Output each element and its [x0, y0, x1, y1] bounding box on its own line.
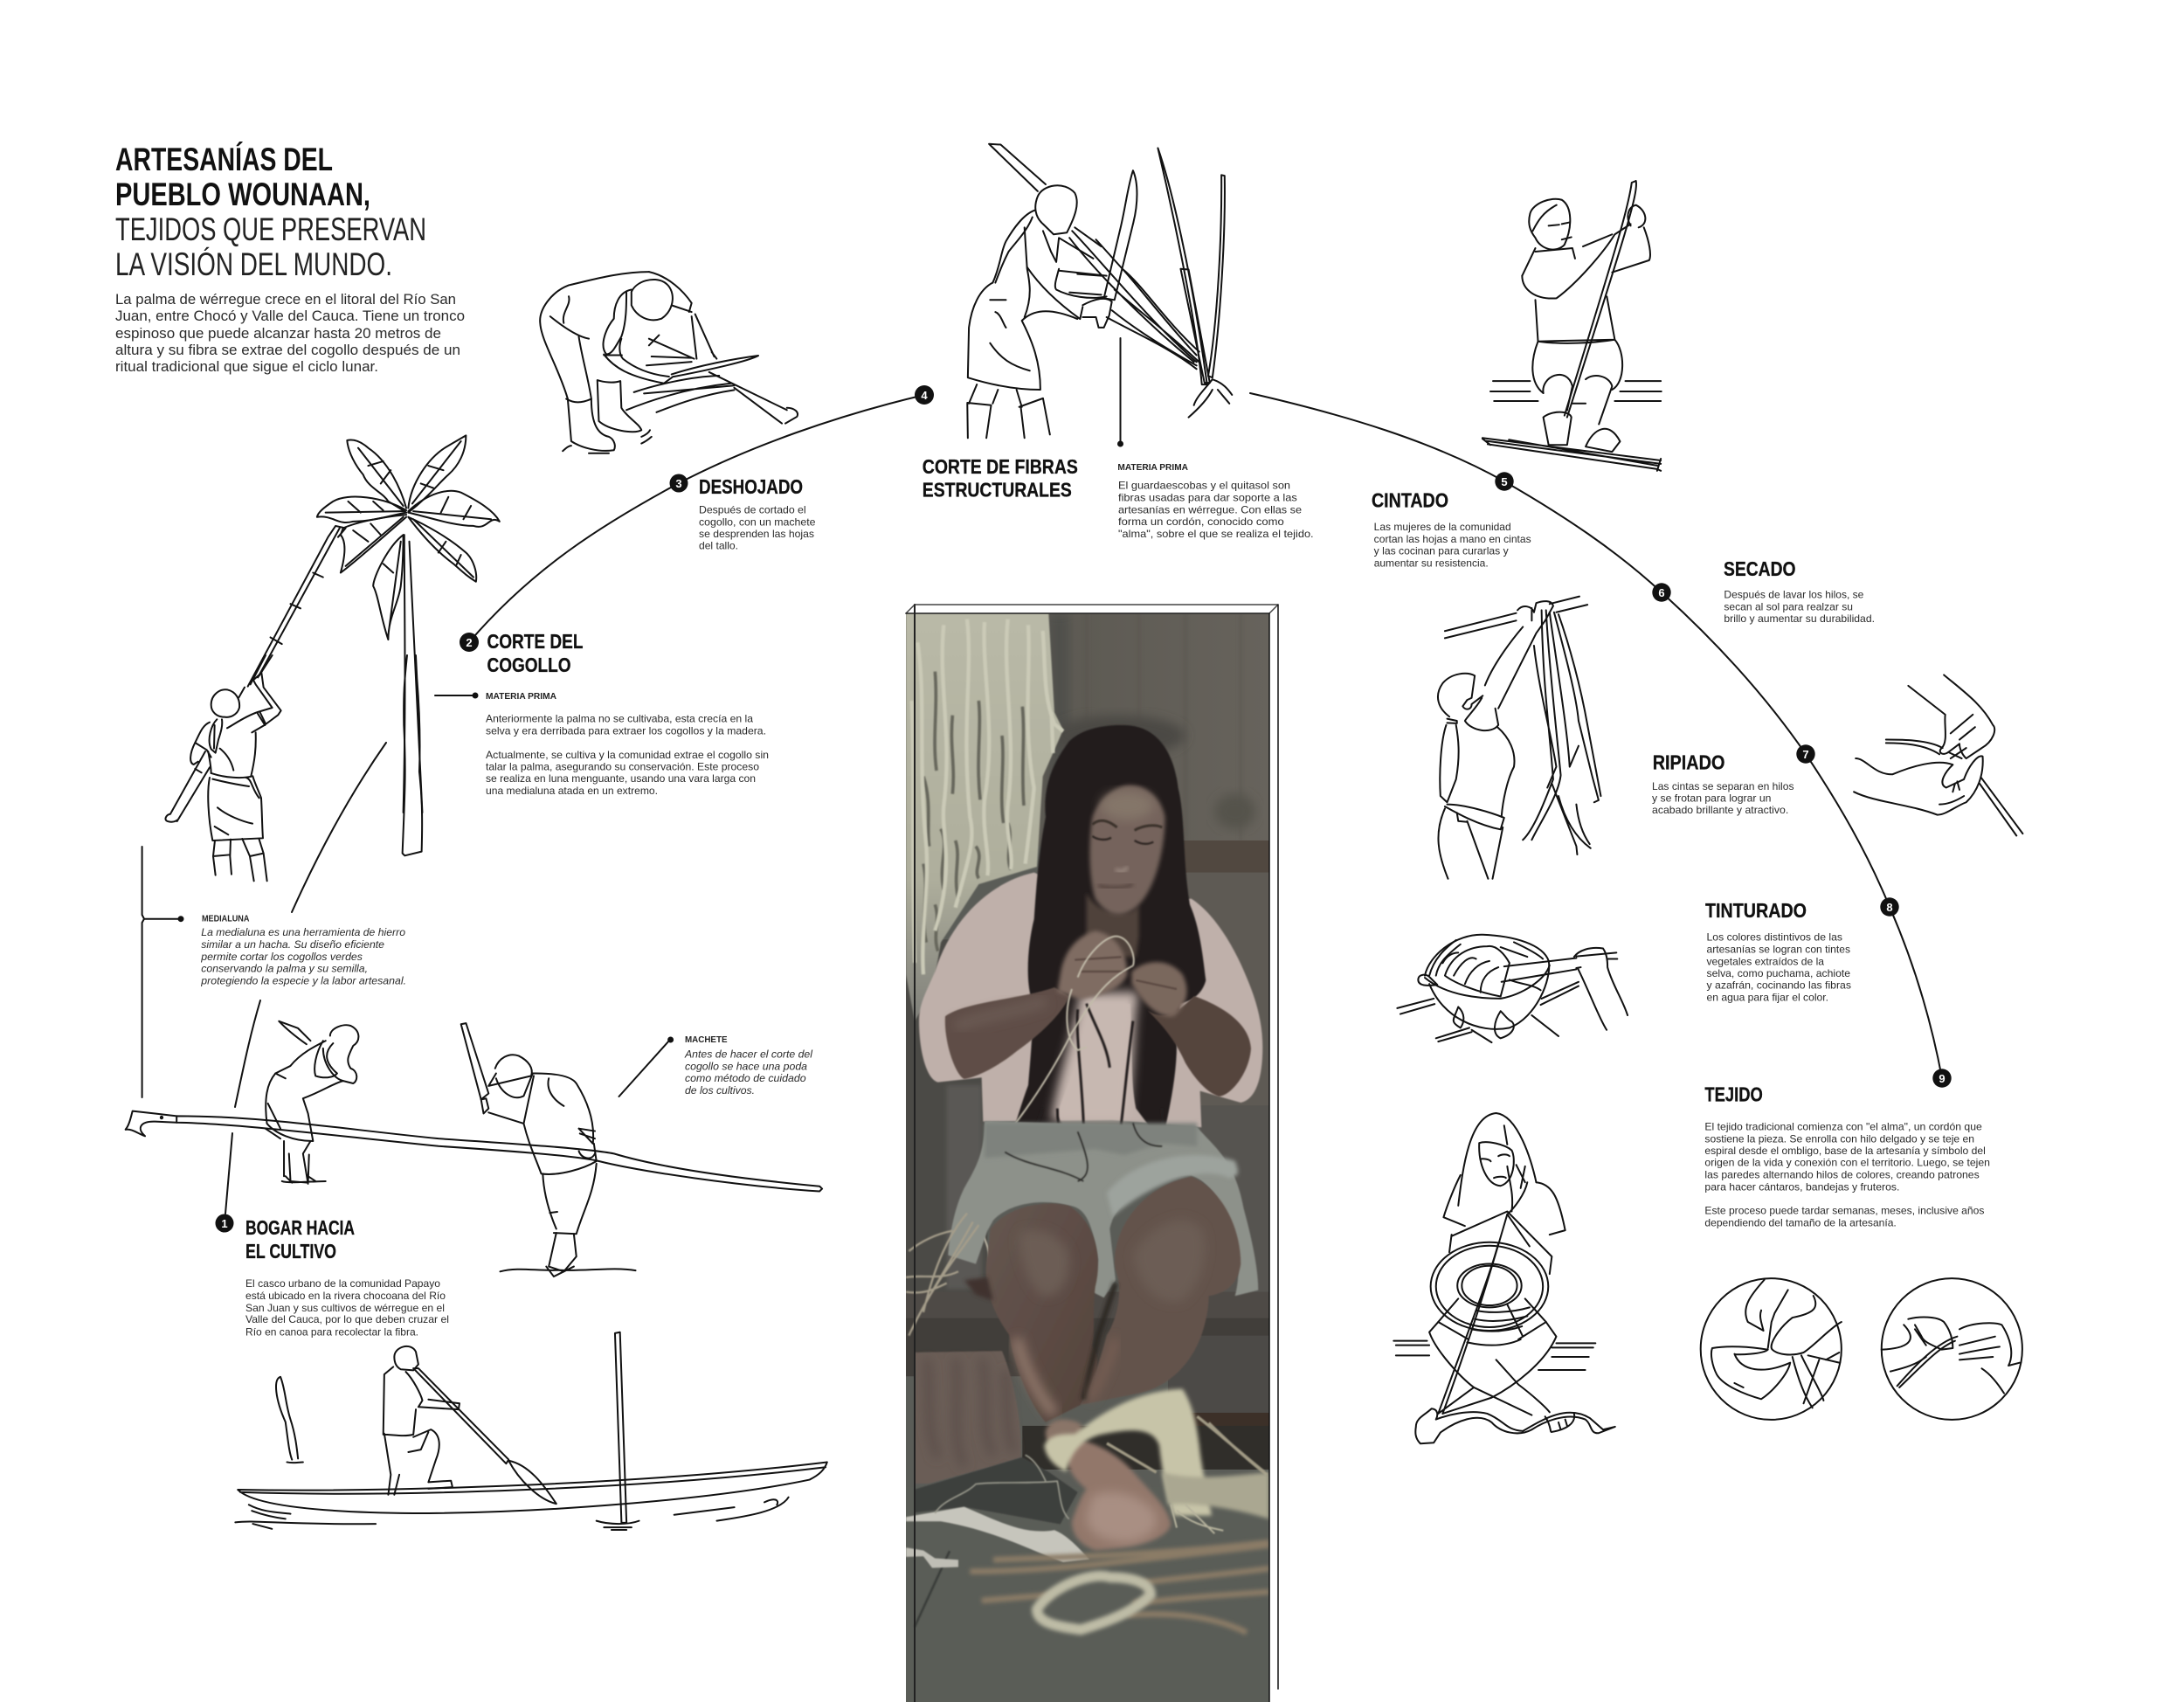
machete callout: cogollo se hace una poda [685, 1061, 807, 1073]
bracket: medialuna [142, 847, 183, 1097]
wall upper [906, 613, 1269, 1301]
step 2 text: corte del cogollo: Anteriormente la palma no se cultivaba, esta crecía en la [486, 713, 753, 725]
step 9 text: tejido: dependiendo del tamaño de la artesanía. [1704, 1216, 1897, 1228]
hands [1057, 931, 1127, 1000]
step 4 text: corte de fibras estructurales: CORTE DE FIBRAS [923, 455, 1078, 478]
step 9 text: tejido: TEJIDO [1704, 1083, 1763, 1106]
step numbers: 7 [1802, 748, 1809, 761]
photo: woman weaving [906, 613, 1269, 1702]
icon: pole to palm [248, 526, 346, 687]
step 3 text: deshojado [699, 475, 816, 552]
step 8 text: tinturado: Los colores distintivos de las [1707, 931, 1842, 944]
left leg [986, 1204, 1098, 1422]
step 5 text: cintado: y las cocinan para curarlas y [1374, 545, 1509, 557]
step 5 text: cintado: cortan las hojas a mano en cintas [1374, 533, 1531, 545]
icon: palm trunk base [403, 655, 422, 855]
title [115, 142, 426, 282]
intro text [115, 292, 465, 375]
medialuna callout: conservando la palma y su semilla, [201, 963, 368, 975]
step 4 text: corte de fibras estructurales [923, 455, 1078, 502]
step 9 text: tejido: espiral desde el ombligo, base de la artesanía y símbolo del [1704, 1145, 1986, 1157]
icon: detail circle hands weaving [1882, 1278, 2022, 1420]
step 8 text: tinturado: artesanías se logran con tintes [1707, 943, 1850, 955]
icon: woman with pole [165, 655, 281, 881]
step 5 text: cintado: Las mujeres de la comunidad [1374, 521, 1511, 533]
step 8 text: tinturado: selva, como puchama, achiote [1707, 967, 1850, 979]
machete callout: Antes de hacer el corte del [684, 1048, 812, 1061]
fiber bundle [1044, 1389, 1212, 1516]
machete connector [619, 1038, 673, 1097]
title: ARTESANÍAS DEL [115, 142, 333, 177]
left arm [945, 987, 1069, 1079]
intro text: La palma de wérregue crece en el litoral del Río San [115, 292, 456, 308]
step 1 text: bogar hacia el cultivo [245, 1216, 449, 1339]
step 1 text: bogar hacia el cultivo: Valle del Cauca, por lo que deben cruzar el [245, 1313, 449, 1325]
materia prima fibras text: El guardaescobas y el quitasol son [1118, 480, 1290, 492]
right arm [1148, 996, 1251, 1097]
fibers curtain [906, 613, 1063, 1021]
icon: woman cutting fibers [967, 144, 1232, 438]
machete callout [684, 1035, 812, 1097]
step 9 text: tejido [1704, 1083, 1990, 1228]
medialuna callout: MEDIALUNA [202, 915, 249, 924]
step 8 text: tinturado: vegetales extraídos de la [1707, 955, 1824, 967]
step 2 text: corte del cogollo: una medialuna atada en un extremo. [486, 785, 658, 797]
step numbers: 2 [466, 636, 473, 649]
step 6 text: secado: brillo y aumentar su durabilidad. [1724, 612, 1875, 625]
stone block [915, 1351, 1078, 1627]
step numbers: 3 [675, 477, 682, 490]
icon: hands rubbing strips [1854, 675, 2022, 835]
step 6 text: secado: Después de lavar los hilos, se [1724, 589, 1864, 601]
medialuna callout: similar a un hacha. Su diseño eficiente [201, 938, 384, 951]
step 1 text: bogar hacia el cultivo: está ubicado en la rivera chocoana del Río [245, 1290, 446, 1302]
icon: woman with machete bent [266, 1021, 358, 1184]
step 2 text: corte del cogollo: talar la palma, asegurando su conservación. Este proceso [486, 760, 759, 772]
step 5 text: cintado: CINTADO [1372, 489, 1448, 512]
step 1 text: bogar hacia el cultivo: Río en canoa para recolectar la fibra. [245, 1326, 418, 1339]
photo frame [906, 605, 1278, 1702]
cream loop [1037, 1576, 1151, 1629]
step 8 text: tinturado: y azafrán, cocinando las fibras [1707, 979, 1851, 992]
step 3 text: deshojado: DESHOJADO [699, 475, 803, 498]
icon: palm tree [317, 435, 500, 813]
step 6 text: secado: SECADO [1724, 557, 1796, 580]
step 3 text: deshojado: cogollo, con un machete [699, 515, 816, 528]
step 5 text: cintado [1372, 489, 1531, 570]
icon: woman stripping leaves [540, 272, 798, 453]
step numbers [215, 385, 1952, 1232]
step 2 text: corte del cogollo: MATERIA PRIMA [486, 692, 556, 702]
title: LA VISIÓN DEL MUNDO. [115, 246, 392, 282]
step 3 text: deshojado: del tallo. [699, 540, 738, 552]
step 9 text: tejido: sostiene la pieza. Se enrolla con hilo delgado y se teje en [1704, 1132, 1974, 1145]
step 1 text: bogar hacia el cultivo: El casco urbano de la comunidad Papayo [245, 1277, 440, 1290]
icon: detail circle foot weaving [1701, 1278, 1842, 1420]
step numbers: 4 [921, 389, 928, 402]
step 7 text: ripiado: RIPIADO [1653, 751, 1724, 773]
loose fibers left [906, 1214, 978, 1336]
intro text: Juan, entre Chocó y Valle del Cauca. Tiene un tronco [115, 308, 465, 324]
step 2 text: corte del cogollo: se realiza en luna menguante, usando una vara larga con [486, 772, 756, 785]
icon: woman hanging strips [1438, 597, 1600, 879]
step 2 text: corte del cogollo: selva y era derribada para extraer los cogollos y la madera. [486, 725, 766, 737]
step 9 text: tejido: origen de la vida y conexión con el territorio. Luego, se tejen [1704, 1157, 1990, 1169]
step 2 text: corte del cogollo: CORTE DEL [487, 630, 584, 653]
step numbers: 6 [1658, 586, 1665, 599]
step 1 text: bogar hacia el cultivo: EL CULTIVO [245, 1240, 336, 1263]
step 8 text: tinturado [1705, 899, 1851, 1003]
step 7 text: ripiado [1652, 751, 1794, 816]
medialuna callout: La medialuna es una herramienta de hierro [201, 926, 405, 938]
medialuna callout: permite cortar los cogollos verdes [200, 951, 363, 963]
icon: canoe with rower [235, 1332, 827, 1530]
intro text: ritual tradicional que sigue el ciclo lunar. [115, 359, 378, 375]
step 3 text: deshojado: se desprenden las hojas [699, 528, 814, 540]
intro text: espinoso que puede alcanzar hasta 20 metros de [115, 326, 441, 342]
step numbers: 5 [1501, 475, 1508, 488]
bench and floor back [906, 1291, 1268, 1470]
right leg [1081, 1177, 1241, 1405]
step numbers: 1 [221, 1217, 228, 1230]
icon: woman weaving basket [1393, 1113, 1615, 1443]
step 9 text: tejido: Este proceso puede tardar semanas, meses, inclusive años [1704, 1205, 1984, 1217]
feet [1046, 1420, 1082, 1446]
step 7 text: ripiado: Las cintas se separan en hilos [1652, 780, 1794, 792]
icon: man with cap and machete [461, 1023, 635, 1276]
machete callout: como método de cuidado [685, 1072, 806, 1084]
chest with hair [1052, 992, 1139, 1122]
medialuna callout [200, 915, 406, 986]
step 2 text: corte del cogollo: Actualmente, se cultiva y la comunidad extrae el cogollo sin [486, 749, 769, 761]
cord [984, 935, 1136, 1256]
materia prima fibras text: fibras usadas para dar soporte a las [1118, 491, 1297, 503]
materia prima fibras text: "alma", sobre el que se realiza el tejido. [1118, 528, 1314, 540]
step 1 text: bogar hacia el cultivo: San Juan y sus cultivos de wérregue en el [245, 1302, 445, 1314]
materia prima fibras text: forma un cordón, conocido como [1118, 515, 1284, 528]
medialuna callout: protegiendo la especie y la labor artesanal. [200, 974, 406, 986]
step 8 text: tinturado: en agua para fijar el color. [1707, 991, 1828, 1003]
title: TEJIDOS QUE PRESERVAN [115, 211, 426, 247]
machete callout: de los cultivos. [685, 1084, 755, 1097]
step 1 text: bogar hacia el cultivo: BOGAR HACIA [245, 1216, 355, 1239]
shorts [948, 1121, 1258, 1297]
step 9 text: tejido: El tejido tradicional comienza con "el alma", un cordón que [1704, 1121, 1982, 1133]
step numbers: 8 [1886, 901, 1893, 914]
step 9 text: tejido: para hacer cántaros, bandejas y fruteros. [1704, 1180, 1899, 1193]
materia prima fibras text [1117, 463, 1314, 540]
step 2 text: corte del cogollo [486, 630, 769, 797]
intro text: altura y su fibra se extrae del cogollo después de un [115, 342, 460, 358]
floor strips [906, 1507, 1089, 1562]
icon: long pole with medialuna hook [126, 1111, 822, 1191]
step 6 text: secado: secan al sol para realzar su [1724, 601, 1853, 613]
materia prima fibras text: MATERIA PRIMA [1117, 463, 1188, 473]
machete callout: MACHETE [685, 1035, 728, 1045]
step 9 text: tejido: las paredes alternando hilos de colores, creando patrones [1704, 1169, 1980, 1181]
step numbers: 9 [1939, 1072, 1946, 1085]
icon: pot on fire [1397, 935, 1628, 1042]
title: PUEBLO WOUNAAN, [115, 176, 370, 212]
callout connector: materia prima palm [435, 694, 477, 697]
materia prima fibras text: artesanías en wérregue. Con ellas se [1118, 503, 1302, 515]
step 7 text: ripiado: acabado brillante y atractivo. [1652, 804, 1788, 816]
step 4 text: corte de fibras estructurales: ESTRUCTURALES [923, 479, 1072, 502]
shirt [919, 873, 1262, 1127]
timeline arc [225, 393, 1942, 1214]
icon: woman on bench stripping [1482, 181, 1662, 471]
callout connector: materia prima fibras [1118, 338, 1123, 446]
tan strands [970, 1542, 1269, 1633]
step 8 text: tinturado: TINTURADO [1705, 899, 1807, 922]
step 6 text: secado [1724, 557, 1875, 625]
step 3 text: deshojado: Después de cortado el [699, 504, 806, 516]
hair [1015, 724, 1207, 1125]
step 2 text: corte del cogollo: COGOLLO [487, 654, 571, 676]
step 7 text: ripiado: y se frotan para lograr un [1652, 792, 1771, 805]
face and neck [1087, 893, 1139, 957]
step 5 text: cintado: aumentar su resistencia. [1374, 557, 1489, 570]
